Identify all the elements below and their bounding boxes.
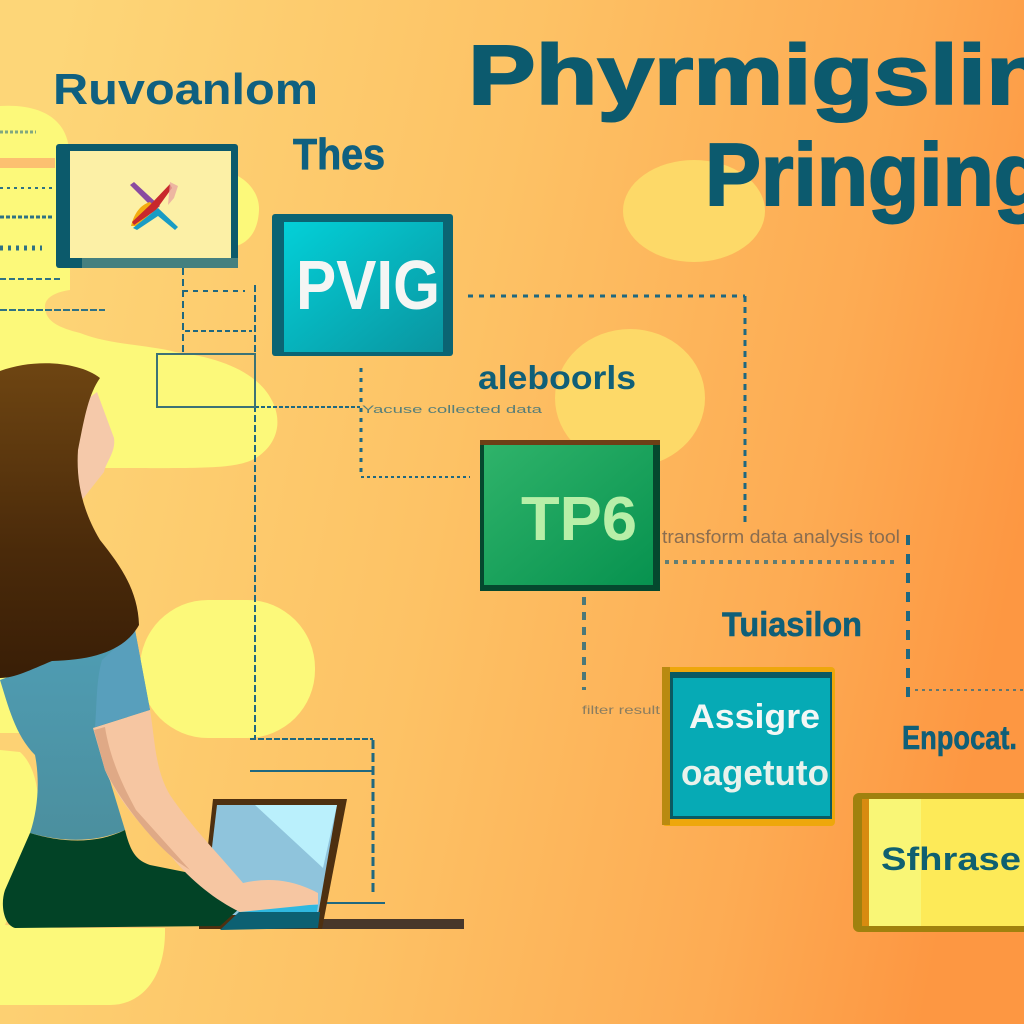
connector captions [362,404,900,717]
card: two-line teal: Assigre [689,698,820,736]
outline box [157,354,255,407]
card: image icon [56,144,238,268]
pants [3,830,240,928]
card: two-line teal [662,667,835,826]
main title: Phyrmigslin [468,28,1024,122]
sleeve [95,630,150,727]
heading: middle: aleboorls [478,359,636,396]
arm [93,710,318,912]
background blobs [0,106,765,1005]
card: PVIG [272,214,453,356]
card: PVIG: PVIG [296,246,440,324]
shirt [0,630,150,840]
side notes [0,132,105,310]
card: TP6 [480,440,660,591]
card: yellow [853,793,1024,932]
laptop [199,799,347,930]
connector captions: Yacuse collected data [362,404,543,416]
desk [199,919,464,929]
main title [468,28,1024,224]
connector captions: transform data analysis tool [662,527,900,547]
card: two-line teal: oagetuto [681,752,829,793]
heading: the: Thes [293,130,385,179]
icon: colourful cross [130,182,178,230]
connector captions: filter result [582,703,661,717]
face [60,392,114,505]
card: TP6: TP6 [521,485,637,554]
heading: left: Ruvoanlom [53,65,318,114]
dashed connectors [183,268,1024,903]
person [0,363,318,928]
hair [0,363,139,678]
card: yellow: Sfhrase [881,841,1021,877]
heading: lower: Tuiasilon [722,606,862,644]
